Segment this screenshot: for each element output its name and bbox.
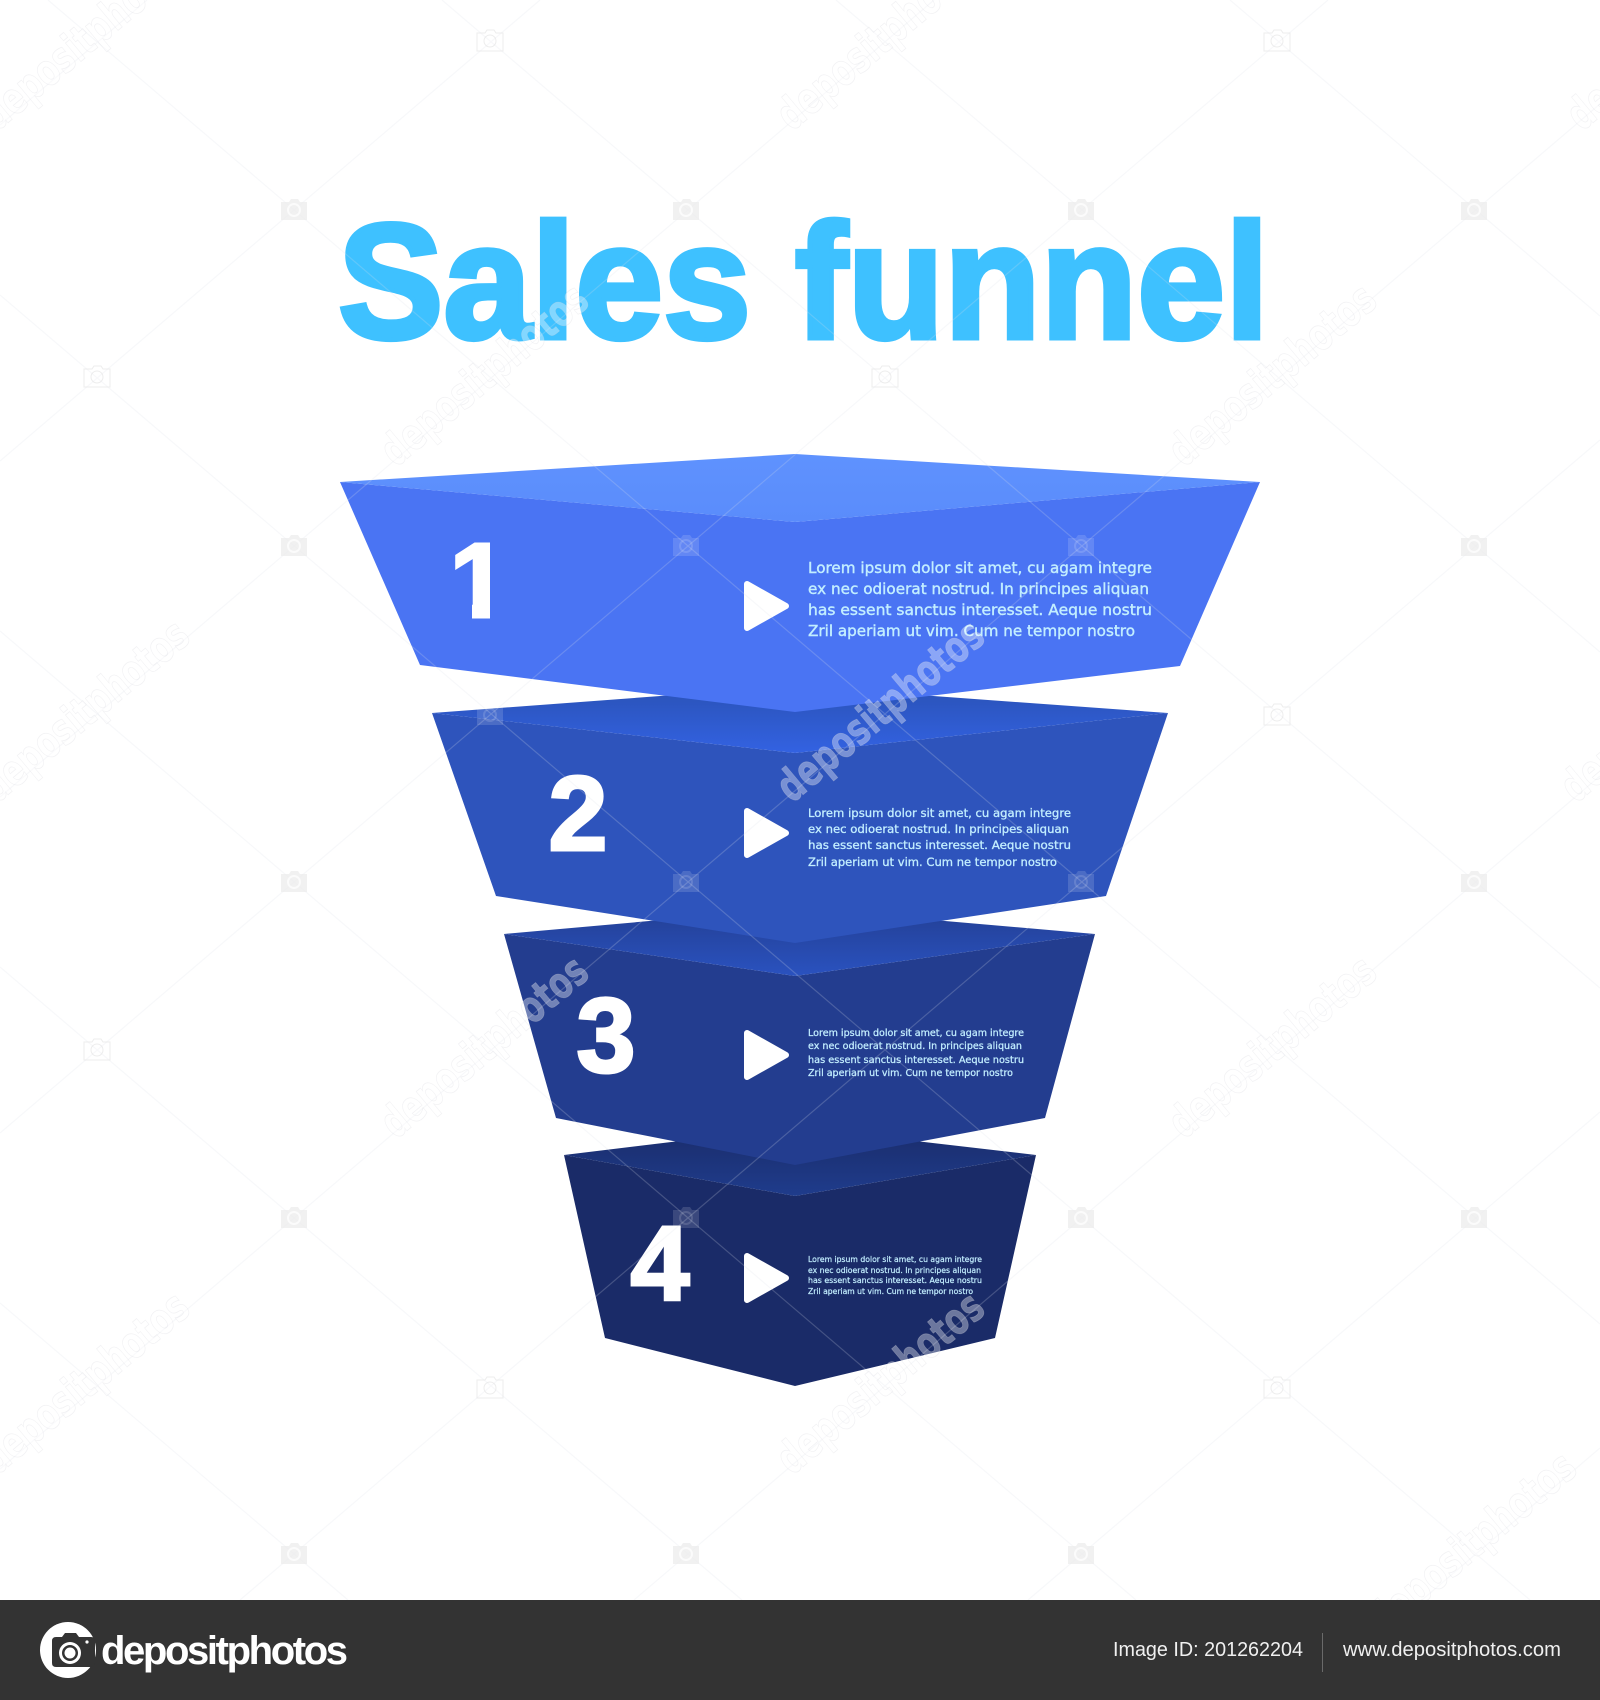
level 1 text block [808,559,1152,640]
panel: funnel level 3 [504,908,1095,1165]
level 2 number: 2 [549,755,607,873]
level 3 text block: Lorem ipsum dolor sit amet, cu agam integre [808,1028,1024,1039]
level 3 number: 3 [577,977,635,1095]
level 2 text block: ex nec odioerat nostrud. In principes aliquan [808,822,1069,836]
level 1 number: 1 [450,522,508,640]
level 2 text block: Lorem ipsum dolor sit amet, cu agam integre [808,806,1071,820]
level 3 front face [504,934,1095,1165]
level 3 text block: ex nec odioerat nostrud. In principes aliquan [808,1041,1022,1052]
level 4 text block [808,1255,982,1296]
level 2 arrow icon [747,811,786,855]
panel: funnel level 4 [564,1127,1036,1386]
level 1 text block: Zril aperiam ut vim. Cum ne tempor nostro [808,622,1135,640]
level 1 text block: ex nec odioerat nostrud. In principes aliquan [808,580,1149,598]
level 4 number: 4 [631,1205,690,1323]
level 1 text block: Lorem ipsum dolor sit amet, cu agam integre [808,559,1152,577]
level 1 front face [340,482,1260,712]
level 3 text block [808,1028,1024,1079]
level 4 text block: ex nec odioerat nostrud. In principes aliquan [808,1266,981,1275]
level 3 top face [504,908,1095,976]
level 4 front face [564,1155,1036,1386]
level 1 arrow icon [747,584,786,628]
panel: funnel level 2 [432,686,1168,943]
level 4 text block: Lorem ipsum dolor sit amet, cu agam integre [808,1255,982,1264]
icon: depositphotos camera logo [40,1622,96,1678]
level 1 top face [340,454,1260,522]
watermark text overlay: depositphotos [766,1281,994,1484]
watermark text overlay: depositphotos [766,609,994,812]
website url: www.depositphotos.com [1342,1639,1561,1661]
level 3 arrow icon [747,1033,786,1077]
watermark camera icons [84,30,1487,1564]
watermark text overlay: depositphotos [1158,273,1386,476]
level 2 front face [432,713,1168,943]
watermark text overlay: depositphotos [370,945,598,1148]
watermark text overlay: depositphotos [1158,945,1386,1148]
level 2 text block [808,806,1071,869]
logo wordmark: depositphotos [101,1629,348,1673]
level 2 text block: has essent sanctus interesset. Aeque nostru [808,838,1071,852]
level 2 top face [432,686,1168,753]
level 4 text block: Zril aperiam ut vim. Cum ne tempor nostro [808,1287,973,1296]
level 2 text block: Zril aperiam ut vim. Cum ne tempor nostro [808,855,1057,869]
level 4 text block: has essent sanctus interesset. Aeque nostru [808,1276,982,1285]
title: Sales funnel [338,190,1269,373]
footer bar [0,1600,1600,1700]
level 4 top face [564,1127,1036,1196]
level 1 text block: has essent sanctus interesset. Aeque nostru [808,601,1152,619]
level 3 text block: Zril aperiam ut vim. Cum ne tempor nostro [808,1068,1013,1079]
image id: Image ID: 201262204 [1113,1639,1303,1661]
level 4 arrow icon [747,1256,786,1300]
level 3 text block: has essent sanctus interesset. Aeque nostru [808,1055,1024,1066]
panel: funnel level 1 [340,454,1260,712]
watermark text overlay: depositphotos [370,273,598,476]
